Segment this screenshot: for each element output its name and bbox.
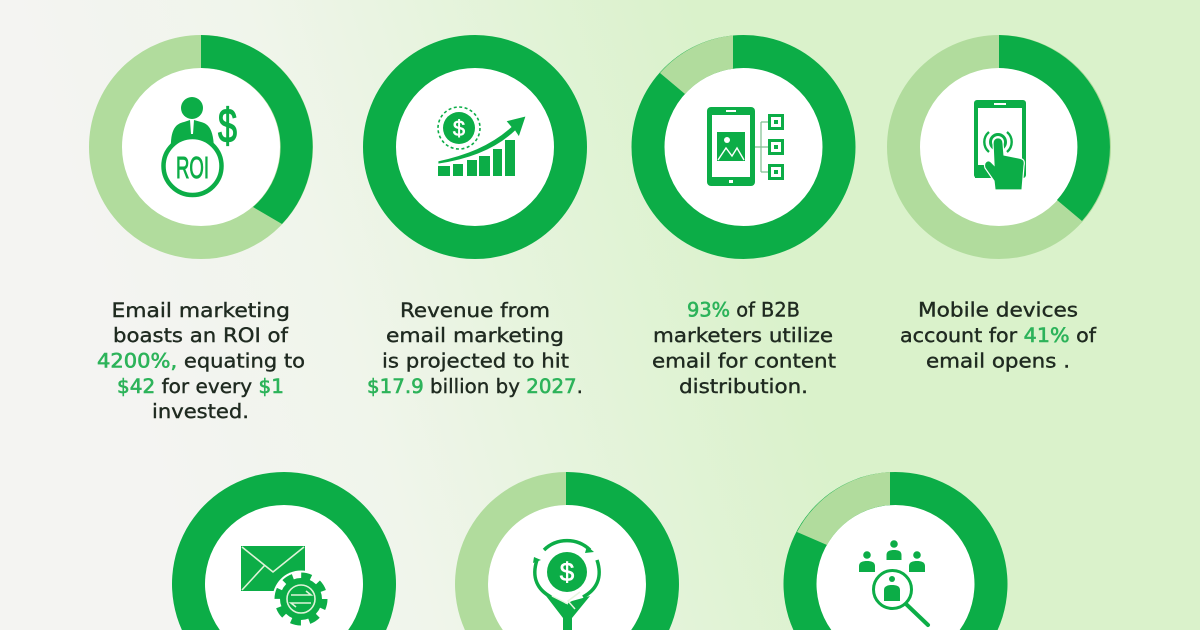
text: ROI: $42 for every $1 (117, 375, 284, 398)
text: revenue: is projected to hit (382, 350, 569, 372)
text: ROI: boasts an ROI of (113, 324, 289, 347)
text: ROI: invested. (152, 400, 249, 423)
icon: ROI person: ROI (176, 150, 209, 185)
donut chart: ROI (106, 35, 313, 242)
icon: tablet with content tree (707, 107, 782, 186)
panel: audience targeting (784, 472, 1008, 630)
text: revenue: Revenue from (400, 299, 550, 322)
panel: ROI statistic (97, 35, 313, 423)
donut chart: audience targeting (784, 472, 1008, 630)
donut chart: mobile (904, 35, 1110, 242)
icon: money funnel: $ (560, 557, 575, 587)
icon: rising revenue chart (438, 107, 526, 176)
icon: rising revenue chart: $ (453, 116, 465, 141)
panel: mobile statistic (900, 35, 1110, 372)
icon: ROI person (164, 97, 237, 195)
text: mobile (900, 298, 1097, 372)
text: revenue (367, 299, 583, 398)
text: ROI: Email marketing (112, 299, 290, 322)
panel: email automation (172, 472, 396, 630)
text: ROI (97, 299, 305, 423)
icon: money funnel (533, 541, 599, 630)
text: revenue: email marketing (386, 324, 564, 347)
panel: B2B statistic (648, 36, 839, 398)
donut chart: B2B (648, 36, 839, 242)
text: ROI: 4200%, equating to (97, 350, 305, 372)
text: B2B: 93% of B2B (687, 298, 800, 322)
icon: envelope with gear (241, 546, 330, 628)
icon: people under magnifier (859, 540, 928, 625)
text: B2B: email for content (652, 350, 836, 372)
text: mobile: Mobile devices (918, 298, 1078, 322)
panel: revenue funnel (455, 472, 679, 630)
text: B2B: marketers utilize (653, 324, 833, 347)
donut chart: revenue funnel (455, 472, 679, 630)
text: mobile: account for 41% of (900, 324, 1097, 347)
donut chart: email automation (172, 472, 396, 630)
text: B2B (652, 298, 836, 398)
panel: revenue statistic (367, 52, 583, 398)
donut chart: revenue (380, 52, 570, 242)
text: mobile: email opens . (926, 350, 1070, 372)
text: B2B: distribution. (679, 375, 808, 398)
icon: touch on phone (974, 100, 1026, 190)
icon: ROI person: $ (218, 100, 237, 153)
text: revenue: $17.9 billion by 2027. (367, 375, 583, 398)
